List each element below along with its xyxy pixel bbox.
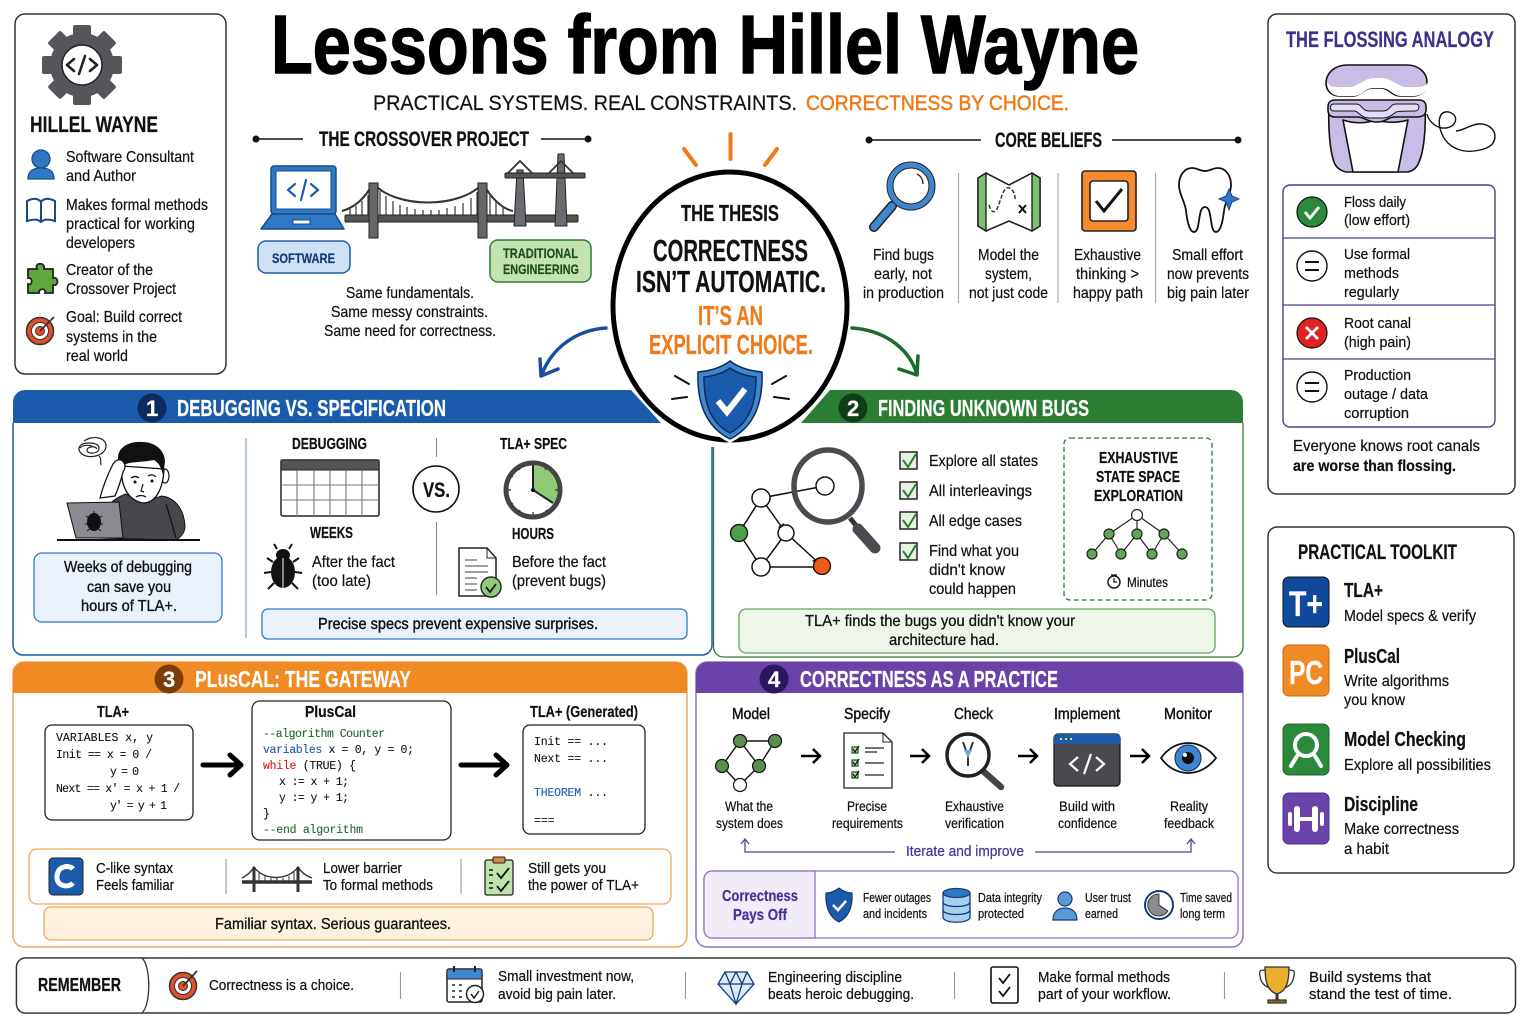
code: tla+ bbox=[45, 704, 193, 820]
text: goal bbox=[66, 309, 182, 365]
row: floss daily: (low effort) bbox=[1344, 212, 1410, 229]
row: root canal: (high pain) bbox=[1344, 334, 1411, 351]
code: tla+ generated: Init == ... bbox=[534, 736, 608, 749]
code: pluscal: } bbox=[263, 808, 270, 821]
loop: iterate and improve: Iterate and improve bbox=[906, 843, 1024, 860]
heading: PRACTICAL TOOLKIT bbox=[1298, 541, 1457, 564]
banner: precise specs: Precise specs prevent expensive surprises. bbox=[318, 616, 598, 633]
callout: weeks of debugging bbox=[34, 553, 222, 622]
arrow bbox=[801, 749, 820, 763]
text: before the fact bbox=[512, 554, 607, 590]
text: role: Software Consultant bbox=[66, 149, 194, 166]
icon: tooth bbox=[1179, 168, 1239, 232]
statement: it's an explicit choice: EXPLICIT CHOICE. bbox=[649, 329, 813, 360]
number badge bbox=[838, 394, 868, 422]
banner: familiar syntax: Familiar syntax. Serious guarantees. bbox=[215, 916, 451, 933]
arrow: thesis to section 2 bbox=[852, 328, 918, 375]
header band bbox=[801, 390, 1243, 423]
feature strip bbox=[29, 849, 671, 904]
text: still gets you: the power of TLA+ bbox=[528, 877, 639, 894]
heading: FINDING UNKNOWN BUGS bbox=[878, 395, 1089, 421]
text: after the fact: After the fact bbox=[312, 554, 396, 571]
text: model the system bbox=[969, 247, 1048, 302]
step: monitor bbox=[1161, 706, 1216, 831]
label: traditional engineering bbox=[490, 240, 591, 282]
label: correctness pays off: Correctness bbox=[722, 888, 798, 905]
code: pluscal bbox=[252, 701, 451, 840]
rays bbox=[684, 134, 777, 165]
icon: open book bbox=[27, 199, 55, 222]
tool: model checking bbox=[1283, 724, 1491, 775]
heading: core beliefs bbox=[866, 129, 1242, 152]
text: data integrity: Data integrity bbox=[978, 891, 1043, 905]
icon: stopwatch bbox=[1108, 575, 1120, 588]
row: root canal bbox=[1297, 315, 1411, 351]
label: correctness pays off: Pays Off bbox=[733, 907, 788, 924]
step: implement: confidence bbox=[1058, 816, 1117, 831]
code: pluscal: PlusCal bbox=[305, 704, 356, 721]
step: check: Exhaustive bbox=[945, 799, 1004, 814]
step: specify: requirements bbox=[832, 816, 903, 831]
icon: magnifying glass bbox=[874, 165, 932, 227]
step: check: verification bbox=[945, 816, 1004, 831]
code: tla+ generated: THEOREM ... bbox=[534, 787, 608, 800]
panel 3: pluscal the gateway bbox=[13, 662, 687, 947]
heading: PLusCAL: THE GATEWAY bbox=[195, 666, 411, 692]
panel: remember bar bbox=[16, 958, 1516, 1013]
text: engineering discipline bbox=[768, 969, 914, 1003]
code: tla+ generated: === bbox=[534, 815, 555, 828]
code: tla+: VARIABLES x, y bbox=[56, 732, 153, 745]
text: model the system: not just code bbox=[969, 285, 1048, 302]
code: tla+ generated: TLA+ (Generated) bbox=[530, 704, 638, 721]
header band bbox=[696, 662, 1243, 693]
statement: it's an explicit choice bbox=[649, 300, 813, 360]
header band bbox=[13, 390, 661, 423]
statement: correctness isn't automatic: ISN’T AUTOMATIC. bbox=[636, 264, 826, 299]
step: model: Model bbox=[732, 706, 770, 723]
text: creator: Creator of the bbox=[66, 262, 153, 279]
text: exhaustive thinking bbox=[1073, 247, 1143, 302]
label: tla+ spec: TLA+ SPEC bbox=[500, 436, 567, 453]
tool: pluscal bbox=[1283, 645, 1449, 709]
text: creator: Crossover Project bbox=[66, 281, 176, 298]
step: monitor: Monitor bbox=[1164, 706, 1213, 723]
icon: calendar bbox=[447, 966, 484, 1002]
tool: pluscal: PlusCal bbox=[1344, 646, 1400, 668]
text: small effort bbox=[1167, 247, 1250, 302]
text: flossing takeaway: Everyone knows root canals bbox=[1293, 438, 1480, 455]
text: data integrity: protected bbox=[978, 907, 1024, 921]
icon: clipboard bbox=[485, 857, 513, 895]
subtitle: CORRECTNESS BY CHOICE. bbox=[806, 92, 1069, 115]
check: all edge cases bbox=[900, 512, 1022, 530]
heading: DEBUGGING VS. SPECIFICATION bbox=[177, 395, 446, 421]
text: role bbox=[66, 149, 194, 185]
statement: correctness isn't automatic bbox=[636, 233, 826, 299]
row: production outage bbox=[1297, 367, 1429, 422]
callout: exhaustive state space exploration: STATE SPACE bbox=[1096, 469, 1180, 486]
panel: practical toolkit bbox=[1268, 527, 1514, 873]
code: pluscal: x := x + 1; bbox=[279, 776, 349, 789]
text: still gets you: Still gets you bbox=[528, 860, 606, 877]
icon: clock bbox=[506, 463, 560, 517]
check: explore all states bbox=[900, 452, 1038, 470]
text: model the system: Model the bbox=[978, 247, 1039, 264]
callout: exhaustive state space exploration: EXHAUSTIVE bbox=[1099, 450, 1178, 467]
code: tla+ generated: Next == ... bbox=[534, 753, 608, 766]
text: before the fact: (prevent bugs) bbox=[512, 573, 606, 590]
callout: exhaustive state space exploration bbox=[1064, 438, 1212, 600]
row: root canal: Root canal bbox=[1344, 315, 1411, 332]
tool: pluscal: you know bbox=[1344, 692, 1405, 709]
icon: c bbox=[49, 858, 83, 895]
text: find bugs early: Find bugs bbox=[873, 247, 934, 264]
panel 1: debugging vs specification bbox=[13, 390, 712, 655]
callout: weeks of debugging: can save you bbox=[87, 579, 171, 596]
step: model bbox=[716, 706, 783, 831]
step: specify bbox=[832, 706, 903, 831]
label: hours: HOURS bbox=[512, 526, 554, 543]
code: pluscal: --end algorithm bbox=[263, 824, 363, 837]
number badge bbox=[154, 664, 184, 694]
text: user trust: earned bbox=[1085, 907, 1118, 921]
text: mission: Makes formal methods bbox=[66, 197, 208, 214]
header band bbox=[13, 662, 687, 693]
text: exhaustive thinking: thinking > bbox=[1076, 266, 1139, 283]
icon: calendar bbox=[281, 460, 379, 516]
badge: vs bbox=[413, 466, 459, 512]
number badge: 3 bbox=[163, 667, 175, 692]
label: software bbox=[258, 241, 350, 273]
heading: core beliefs: CORE BELIEFS bbox=[995, 129, 1102, 152]
icon: map bbox=[978, 173, 1040, 231]
text: time saved: Time saved bbox=[1180, 891, 1232, 905]
icon: suspension bridge bbox=[342, 154, 585, 238]
panel: Hillel Wayne profile bbox=[15, 14, 226, 374]
text: lower barrier: To formal methods bbox=[323, 877, 433, 894]
text: find bugs early: in production bbox=[863, 285, 944, 302]
tool: tla+ bbox=[1283, 577, 1476, 627]
number badge: 1 bbox=[146, 396, 158, 421]
text: model the system: system, bbox=[985, 266, 1032, 283]
text: mission: practical for working bbox=[66, 216, 195, 233]
text: goal: Goal: Build correct bbox=[66, 309, 182, 326]
text: time saved: long term bbox=[1180, 907, 1225, 921]
text: make formal methods: Make formal methods bbox=[1038, 969, 1170, 986]
text: make formal methods bbox=[1038, 969, 1171, 1003]
text: make formal methods: part of your workflow. bbox=[1038, 986, 1171, 1003]
text: correctness is a choice: Correctness is a choice. bbox=[209, 977, 354, 994]
callout: exhaustive state space exploration: EXPLORATION bbox=[1094, 488, 1183, 505]
check: find what you didn't know: could happen bbox=[929, 581, 1016, 598]
icon: bridge bbox=[242, 867, 312, 892]
tool: tla+: TLA+ bbox=[1344, 580, 1383, 602]
check: all interleavings: All interleavings bbox=[929, 483, 1032, 500]
text: c-like syntax: C-like syntax bbox=[96, 860, 173, 877]
icon: clock bbox=[1145, 891, 1173, 919]
code: tla+: TLA+ bbox=[97, 704, 129, 721]
text: user trust: User trust bbox=[1085, 891, 1131, 905]
arrow bbox=[461, 755, 507, 775]
title: Lessons from Hillel Wayne bbox=[271, 0, 1139, 91]
text: before the fact: Before the fact bbox=[512, 554, 607, 571]
text: fewer outages: Fewer outages bbox=[863, 891, 931, 905]
tool: discipline: Make correctness bbox=[1344, 821, 1459, 838]
icon: laptop bbox=[261, 166, 344, 229]
illustration: state graph with magnifier bbox=[730, 450, 875, 576]
label: correctness pays off bbox=[722, 888, 798, 924]
label: weeks: WEEKS bbox=[310, 525, 353, 542]
arrow bbox=[1130, 749, 1149, 763]
arrow bbox=[1018, 749, 1037, 763]
step: monitor: feedback bbox=[1164, 816, 1214, 831]
icon: checklist bbox=[991, 967, 1018, 1003]
text: small investment: Small investment now, bbox=[498, 968, 634, 985]
icon: database bbox=[943, 888, 970, 922]
row: use formal methods: regularly bbox=[1344, 284, 1399, 301]
label: debugging: DEBUGGING bbox=[292, 436, 367, 453]
text: small effort: Small effort bbox=[1172, 247, 1243, 264]
code: tla+: Next == x' = x + 1 / bbox=[56, 783, 180, 796]
text: crossover summary: Same fundamentals. bbox=[346, 285, 474, 302]
text: build systems: Build systems that bbox=[1309, 969, 1432, 986]
text: crossover summary: Same messy constraints. bbox=[331, 304, 488, 321]
check: all interleavings bbox=[900, 482, 1032, 500]
label: traditional engineering: ENGINEERING bbox=[503, 261, 579, 277]
text: exhaustive thinking: happy path bbox=[1073, 285, 1143, 302]
number badge: 4 bbox=[768, 667, 781, 692]
arrow bbox=[203, 755, 241, 775]
text: crossover summary: Same need for correctness. bbox=[324, 323, 496, 340]
text: after the fact: (too late) bbox=[312, 573, 371, 590]
tool: tla+: Model specs & verify bbox=[1344, 608, 1476, 625]
panel: correctness pays off bbox=[704, 871, 1238, 938]
step: model: What the bbox=[725, 799, 773, 814]
tool: pluscal: Write algorithms bbox=[1344, 673, 1449, 690]
number badge bbox=[138, 394, 166, 422]
text: fewer outages: and incidents bbox=[863, 907, 927, 921]
label: traditional engineering: TRADITIONAL bbox=[503, 245, 578, 261]
code: tla+: y = 0 bbox=[110, 766, 139, 779]
banner: tla+ finds the bugs: architecture had. bbox=[889, 632, 999, 649]
text: time saved bbox=[1180, 891, 1232, 921]
icon: floss container bbox=[1326, 65, 1495, 172]
text: mission bbox=[66, 197, 208, 252]
tool: model checking: Model Checking bbox=[1344, 729, 1466, 751]
code: pluscal: --algorithm Counter bbox=[263, 728, 385, 741]
label: remember: REMEMBER bbox=[38, 975, 121, 995]
icon: bug bbox=[264, 544, 302, 589]
text: find bugs early bbox=[863, 247, 944, 302]
step: specify: Precise bbox=[847, 799, 887, 814]
panel 2: finding unknown bugs bbox=[714, 390, 1243, 657]
heading: the crossover project: THE CROSSOVER PROJECT bbox=[319, 128, 529, 151]
code: pluscal: while (TRUE) { bbox=[263, 760, 356, 773]
text: fewer outages bbox=[863, 891, 931, 921]
icon: spec document bbox=[459, 548, 501, 597]
panel 4: correctness as a practice bbox=[696, 662, 1243, 947]
row: floss daily: Floss daily bbox=[1344, 194, 1406, 211]
tool: discipline: a habit bbox=[1344, 841, 1390, 858]
text: c-like syntax: Feels familiar bbox=[96, 877, 174, 894]
text: role: and Author bbox=[66, 168, 137, 185]
badge: vs: VS. bbox=[423, 479, 450, 502]
icon: person bbox=[28, 150, 54, 179]
banner: familiar syntax bbox=[44, 907, 653, 940]
heading: CORRECTNESS AS A PRACTICE bbox=[800, 666, 1058, 692]
tool: model checking: Explore all possibilities bbox=[1344, 757, 1491, 774]
step: specify: Specify bbox=[844, 706, 890, 723]
label: software: SOFTWARE bbox=[272, 250, 335, 266]
step: implement: Implement bbox=[1054, 706, 1120, 723]
checklist bbox=[900, 452, 1038, 598]
thesis circle bbox=[613, 134, 847, 440]
callout: weeks of debugging: Weeks of debugging bbox=[64, 559, 192, 576]
text: mission: developers bbox=[66, 235, 135, 252]
row: use formal methods bbox=[1297, 246, 1410, 301]
text: flossing takeaway bbox=[1293, 438, 1480, 475]
tool: discipline bbox=[1283, 793, 1459, 858]
number badge: 2 bbox=[847, 396, 859, 421]
arrow bbox=[910, 749, 929, 763]
icon: trophy bbox=[1260, 967, 1294, 1003]
subtitle bbox=[373, 92, 1069, 115]
tool: discipline: Discipline bbox=[1344, 794, 1418, 816]
text: small investment: avoid big pain later. bbox=[498, 986, 616, 1003]
row: use formal methods: Use formal bbox=[1344, 246, 1410, 263]
check: find what you didn't know bbox=[900, 543, 1019, 598]
callout: weeks of debugging: hours of TLA+. bbox=[81, 598, 177, 615]
step: monitor: Reality bbox=[1170, 799, 1208, 814]
tool: tla+: T+ bbox=[1289, 585, 1323, 624]
text: engineering discipline: beats heroic debugging. bbox=[768, 986, 914, 1003]
text: exhaustive thinking: Exhaustive bbox=[1074, 247, 1141, 264]
step: implement bbox=[1054, 706, 1120, 831]
text: build systems: stand the test of time. bbox=[1309, 986, 1452, 1003]
text: small effort: now prevents bbox=[1167, 266, 1249, 283]
text: data integrity bbox=[978, 891, 1043, 921]
panel: core beliefs items bbox=[863, 165, 1250, 303]
icon: target bbox=[170, 971, 197, 1000]
loop: iterate and improve bbox=[741, 839, 1195, 860]
text: after the fact bbox=[312, 554, 396, 590]
text: still gets you bbox=[528, 860, 639, 894]
banner: tla+ finds the bugs bbox=[739, 609, 1215, 653]
check: find what you didn't know: Find what you bbox=[929, 543, 1019, 560]
number badge bbox=[760, 664, 788, 694]
text: crossover summary bbox=[324, 285, 496, 340]
text: small investment bbox=[498, 968, 634, 1003]
row: floss daily bbox=[1297, 194, 1410, 229]
check: all edge cases: All edge cases bbox=[929, 513, 1022, 530]
label: minutes: Minutes bbox=[1127, 575, 1168, 590]
tool: pluscal: PC bbox=[1289, 654, 1323, 691]
banner: tla+ finds the bugs: TLA+ finds the bugs you didn't know your bbox=[805, 613, 1076, 630]
step: check bbox=[945, 706, 1004, 831]
icon: target bbox=[26, 317, 54, 344]
table: effort comparison bbox=[1283, 185, 1495, 427]
text: lower barrier: Lower barrier bbox=[323, 860, 402, 877]
check: find what you didn't know: didn't know bbox=[929, 562, 1005, 579]
text: small effort: big pain later bbox=[1167, 285, 1250, 302]
step: model: system does bbox=[716, 816, 783, 831]
panel: flossing analogy bbox=[1268, 14, 1515, 494]
code: pluscal: y := y + 1; bbox=[279, 792, 349, 805]
row: use formal methods: methods bbox=[1344, 265, 1399, 282]
icon: gear with code bbox=[42, 25, 122, 105]
check: explore all states: Explore all states bbox=[929, 453, 1038, 470]
icon: puzzle piece bbox=[28, 264, 58, 293]
text: lower barrier bbox=[323, 860, 433, 894]
arrow: thesis to section 1 bbox=[540, 328, 606, 376]
text: build systems bbox=[1309, 969, 1452, 1003]
step: implement: Build with bbox=[1059, 799, 1115, 814]
text: engineering discipline: Engineering discipline bbox=[768, 969, 902, 986]
code: tla+ generated bbox=[523, 704, 645, 834]
row: production outage: corruption bbox=[1344, 405, 1409, 422]
heading: Hillel Wayne: HILLEL WAYNE bbox=[30, 112, 158, 137]
tree diagram bbox=[1087, 510, 1187, 559]
icon: diamond bbox=[718, 972, 754, 1004]
statement: it's an explicit choice: IT’S AN bbox=[698, 300, 763, 331]
text: flossing takeaway: are worse than flossing. bbox=[1293, 458, 1456, 475]
code: tla+: Init == x = 0 / bbox=[56, 749, 152, 762]
step: check: Check bbox=[954, 706, 994, 723]
icon: shield bbox=[826, 888, 852, 922]
statement: correctness isn't automatic: CORRECTNESS bbox=[653, 233, 808, 268]
text: creator bbox=[66, 262, 176, 298]
text: c-like syntax bbox=[96, 860, 174, 894]
icon: shield bbox=[672, 361, 789, 439]
code: pluscal: variables x = 0, y = 0; bbox=[263, 744, 414, 757]
icon: checkbox bbox=[1082, 171, 1136, 231]
text: goal: systems in the bbox=[66, 329, 157, 346]
row: production outage: outage / data bbox=[1344, 386, 1429, 403]
label: the thesis: THE THESIS bbox=[681, 200, 779, 226]
banner: precise specs bbox=[262, 609, 687, 639]
code: tla+: y' = y + 1 bbox=[110, 800, 167, 813]
text: goal: real world bbox=[66, 348, 128, 365]
row: production outage: Production bbox=[1344, 367, 1411, 384]
text: find bugs early: early, not bbox=[874, 266, 932, 283]
text: user trust bbox=[1085, 891, 1131, 921]
icon: user bbox=[1053, 892, 1077, 920]
subtitle: PRACTICAL SYSTEMS. REAL CONSTRAINTS. bbox=[373, 92, 797, 115]
illustration: stressed developer bbox=[57, 438, 200, 540]
